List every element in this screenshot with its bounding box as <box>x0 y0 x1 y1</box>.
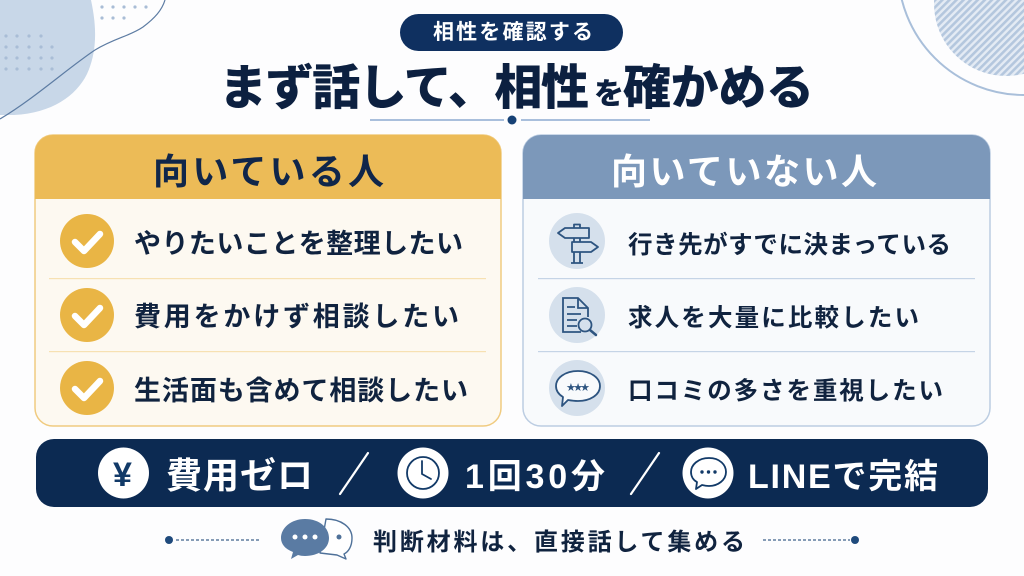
row: compare listings <box>549 287 919 343</box>
row: organise <box>60 214 463 268</box>
slash <box>340 453 368 494</box>
panel header: suited: 向いている人 <box>153 151 384 192</box>
row: free consultation <box>60 288 459 342</box>
row: destination decided <box>549 213 951 269</box>
icon: document search <box>563 298 596 335</box>
item: 30 minutes: 1回30分 <box>465 458 605 496</box>
title: を <box>594 78 624 111</box>
panel: suited <box>35 135 501 426</box>
tag pill: 相性を確認する <box>433 21 593 44</box>
row: organise: やりたいことを整理したい <box>134 229 463 259</box>
item: 30 minutes <box>398 448 605 498</box>
summary bar <box>36 439 988 507</box>
item: LINE <box>682 448 938 498</box>
title <box>219 62 814 115</box>
icon: clock <box>407 457 439 489</box>
item: free: ¥ <box>113 456 132 494</box>
icon: speech bubble with stars: ★★★ <box>566 381 590 394</box>
slash <box>631 453 659 494</box>
row: compare listings: 求人を大量に比較したい <box>628 304 919 332</box>
item: free <box>98 448 313 498</box>
row: lifestyle <box>60 361 468 415</box>
row: lifestyle: 生活面も含めて相談したい <box>134 376 468 406</box>
decoration: top-right hatched circle and arc <box>898 0 1024 95</box>
item: LINE: LINEで完結 <box>748 458 938 496</box>
row: destination decided: 行き先がすでに決まっている <box>628 230 951 259</box>
tag pill <box>400 14 623 51</box>
title divider <box>370 116 650 124</box>
icon: speech bubble with stars <box>556 371 600 406</box>
panel: not suited <box>523 135 990 426</box>
panel header: not suited <box>523 135 990 199</box>
icon: signpost <box>558 224 598 263</box>
icon: chat bubble <box>691 458 726 489</box>
icon: conversation bubbles <box>281 519 352 559</box>
item: free: 費用ゼロ <box>166 455 313 496</box>
title: 確かめる <box>623 62 814 115</box>
footer note <box>165 519 859 559</box>
row: reviews: 口コミの多さを重視したい <box>628 377 943 405</box>
title: まず話して、相性 <box>219 62 589 115</box>
panel header: suited <box>35 135 501 199</box>
decoration: top-left blob <box>0 0 165 119</box>
footer note: 判断材料は、直接話して集める <box>373 529 745 556</box>
row: reviews <box>549 360 943 416</box>
panel header: not suited: 向いていない人 <box>611 151 877 192</box>
row: free consultation: 費用をかけず相談したい <box>134 302 459 332</box>
